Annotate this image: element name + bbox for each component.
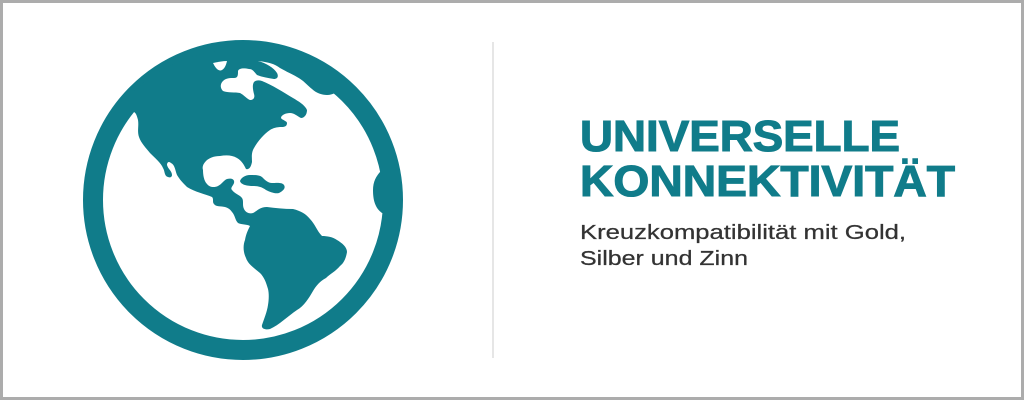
body line 2: Silber und Zinn — [580, 248, 748, 270]
land: Africa edge — [373, 170, 392, 214]
icon: globe — [93, 50, 393, 350]
heading line 1: UNIVERSELLE — [580, 112, 900, 161]
land: Arctic island cut-out — [213, 61, 227, 70]
globe ring — [93, 50, 393, 350]
divider — [492, 42, 494, 358]
land: Greenland — [258, 51, 345, 95]
body line 1: Kreuzkompatibilität mit Gold, — [580, 222, 906, 244]
land: the Americas — [122, 50, 347, 329]
heading line 2: KONNEKTIVITÄT — [580, 157, 955, 206]
body text — [580, 222, 906, 270]
heading — [580, 112, 955, 206]
land: Caribbean island — [240, 175, 285, 193]
